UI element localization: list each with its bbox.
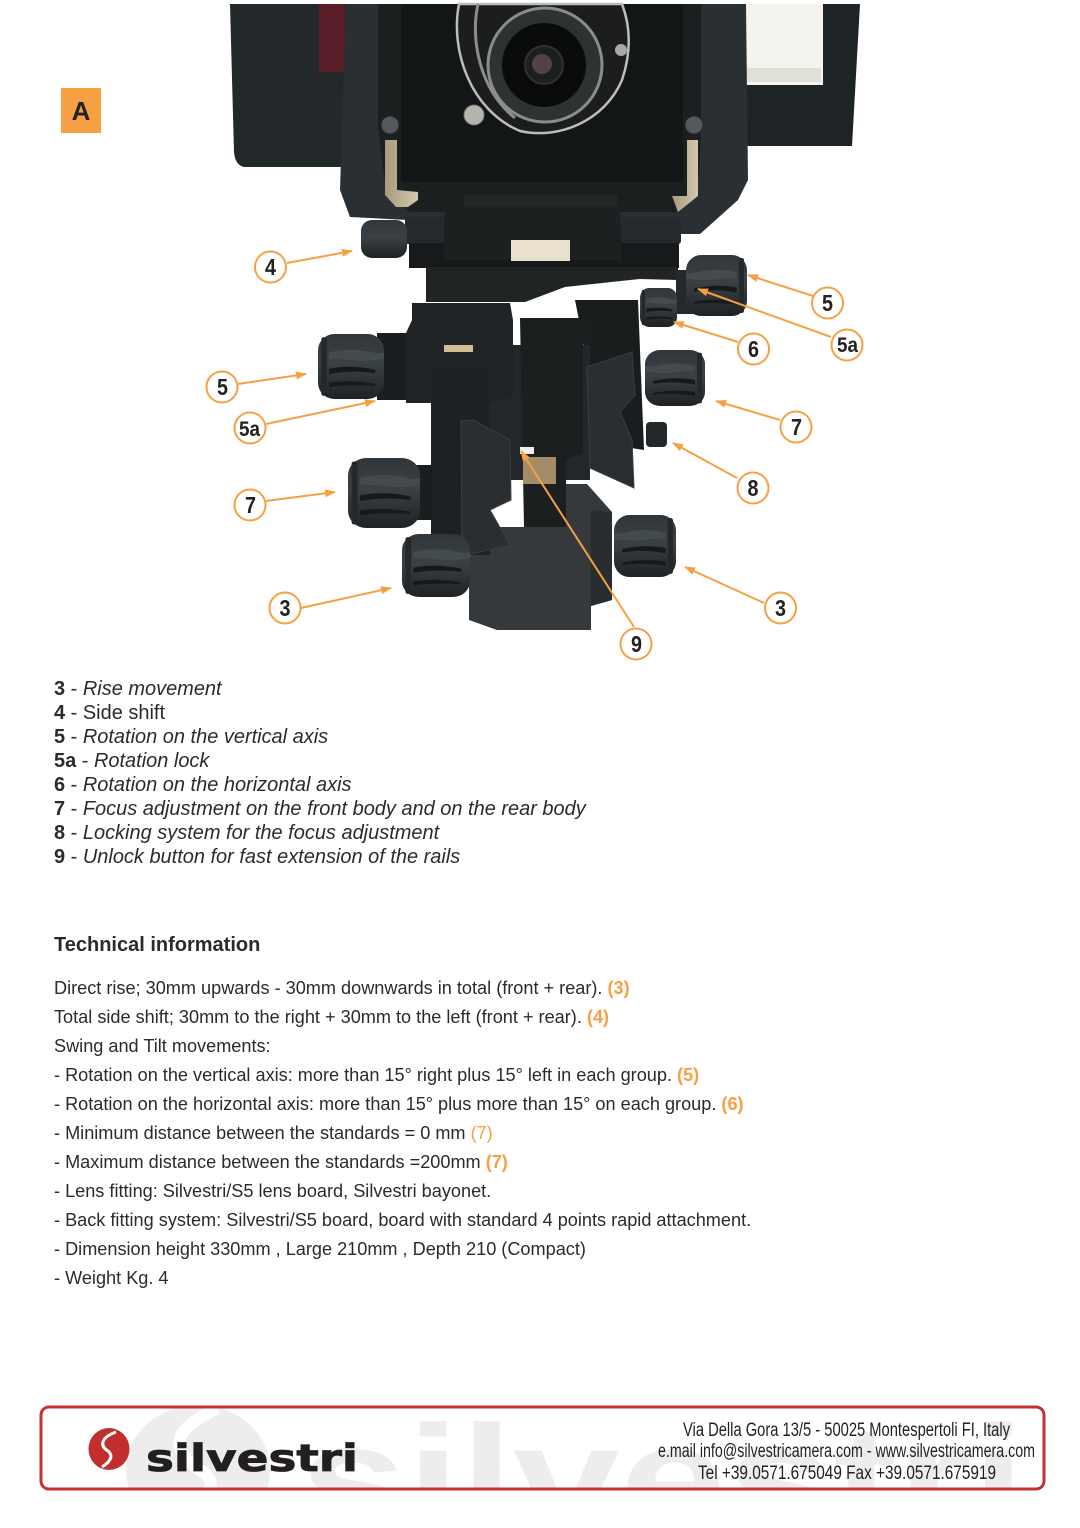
illustration: camera photo with callouts (206, 2, 864, 660)
technical information text: - Maximum distance between the standards =200mm (7) (54, 1152, 508, 1172)
right knob 7 (645, 350, 705, 406)
technical information text: Total side shift; 30mm to the right + 30mm to the left (front + rear). (4) (54, 1007, 609, 1027)
section badge A: A (72, 96, 90, 126)
shift scale (511, 240, 570, 261)
camera photo (230, 4, 860, 630)
legend list: 5 - Rotation on the vertical axis (54, 726, 328, 748)
legend list: 6 - Rotation on the horizontal axis (54, 774, 352, 796)
callout 5 left: 5 (217, 374, 228, 400)
technical information text: - Dimension height 330mm , Large 210mm , Depth 210 (Compact) (54, 1239, 586, 1259)
callout 9: 9 (631, 631, 642, 657)
scale plate detail (523, 457, 556, 484)
front standard bar (405, 217, 681, 244)
callout 5a left (234, 401, 375, 444)
lens board (401, 4, 683, 182)
footer border (41, 1407, 1044, 1489)
technical information text: - Weight Kg. 4 (54, 1268, 169, 1288)
section badge A (61, 88, 101, 133)
bellows (340, 4, 748, 234)
tan tab (444, 345, 473, 352)
heading: technical information: Technical information (54, 934, 260, 956)
callout 5a right (698, 289, 862, 360)
legend list: 3 - Rise movement (54, 678, 222, 700)
callout 3 right (685, 567, 796, 624)
unlock button (520, 447, 534, 454)
callout 8: 8 (748, 475, 759, 501)
lens (457, 4, 629, 133)
callout 7 right (716, 401, 812, 442)
legend list: 5a - Rotation lock (54, 750, 209, 772)
right arm (575, 300, 644, 450)
upper knob 4 (361, 220, 407, 258)
logo wordmark: silvestri (146, 1437, 358, 1480)
callout 3 left (270, 588, 391, 624)
legend list: 7 - Focus adjustment on the front body and on the rear body (54, 798, 586, 820)
callout 5a left: 5a (239, 418, 260, 441)
callout 5 left (206, 372, 306, 402)
right knob 3 (614, 515, 676, 577)
left column (431, 370, 490, 555)
callout 6: 6 (748, 336, 759, 362)
callout 7 left (234, 490, 335, 520)
footer banner (40, 1406, 1046, 1490)
lower bar (409, 243, 679, 268)
left knob 5 (318, 333, 407, 400)
logo mark (88, 1428, 130, 1470)
callout 9 (521, 451, 652, 660)
left knob 3 (402, 534, 470, 597)
mechanism behind rails (488, 345, 590, 480)
callout 4 (255, 251, 352, 282)
callout 3 left: 3 (280, 595, 290, 621)
callout 5a right: 5a (837, 334, 858, 357)
callout 5 right: 5 (822, 290, 833, 316)
technical information text (54, 978, 751, 1288)
left head top (406, 303, 513, 403)
base block (469, 484, 612, 630)
watermark (126, 1408, 1012, 1488)
callout 6 (674, 322, 769, 364)
upper right knob 5 (676, 255, 747, 316)
technical information text: - Rotation on the horizontal axis: more than 15° plus more than 15° on each group. (6) (54, 1094, 744, 1114)
technical information text: - Lens fitting: Silvestri/S5 lens board, Silvestri bayonet. (54, 1181, 491, 1201)
left side plate (461, 420, 511, 556)
lens standard (378, 4, 701, 212)
technical information text: - Back fitting system: Silvestri/S5 board, board with standard 4 points rapid attachment. (54, 1210, 751, 1230)
callout 4: 4 (265, 254, 276, 280)
technical information text: - Minimum distance between the standards = 0 mm (7) (54, 1123, 493, 1143)
lock knob 8 (646, 422, 667, 447)
rear left plate (230, 4, 350, 167)
telephone and fax: Tel +39.0571.675049 Fax +39.0571.675919 (698, 1463, 996, 1484)
side shift block (443, 207, 622, 260)
callout 5 right (748, 275, 843, 318)
base side shade (591, 510, 612, 606)
legend list (54, 678, 587, 868)
center rail (520, 318, 591, 527)
red serial label (319, 4, 345, 72)
legend list: 9 - Unlock button for fast extension of the rails (54, 846, 460, 868)
legend list: 8 - Locking system for the focus adjustment (54, 822, 439, 844)
callout 7 right: 7 (791, 414, 802, 440)
technical information text: Swing and Tilt movements: (54, 1036, 271, 1056)
base curved plate (426, 267, 678, 302)
knob 6 (640, 288, 677, 327)
legend list: 4 - Side shift (54, 702, 165, 724)
right side plate (587, 352, 635, 488)
bolts (381, 116, 703, 134)
callout 7 left: 7 (245, 492, 256, 518)
rear right frame and window (740, 4, 860, 146)
callout 8 (673, 443, 768, 504)
tan brackets (385, 140, 698, 212)
left knob 7 (348, 458, 433, 528)
callout 3 right: 3 (775, 595, 786, 621)
technical information text: Direct rise; 30mm upwards - 30mm downwards in total (front + rear). (3) (54, 978, 630, 998)
frame beneath lens board (464, 195, 618, 208)
technical information text: - Rotation on the vertical axis: more than 15° right plus 15° left in each group. (5) (54, 1065, 699, 1085)
